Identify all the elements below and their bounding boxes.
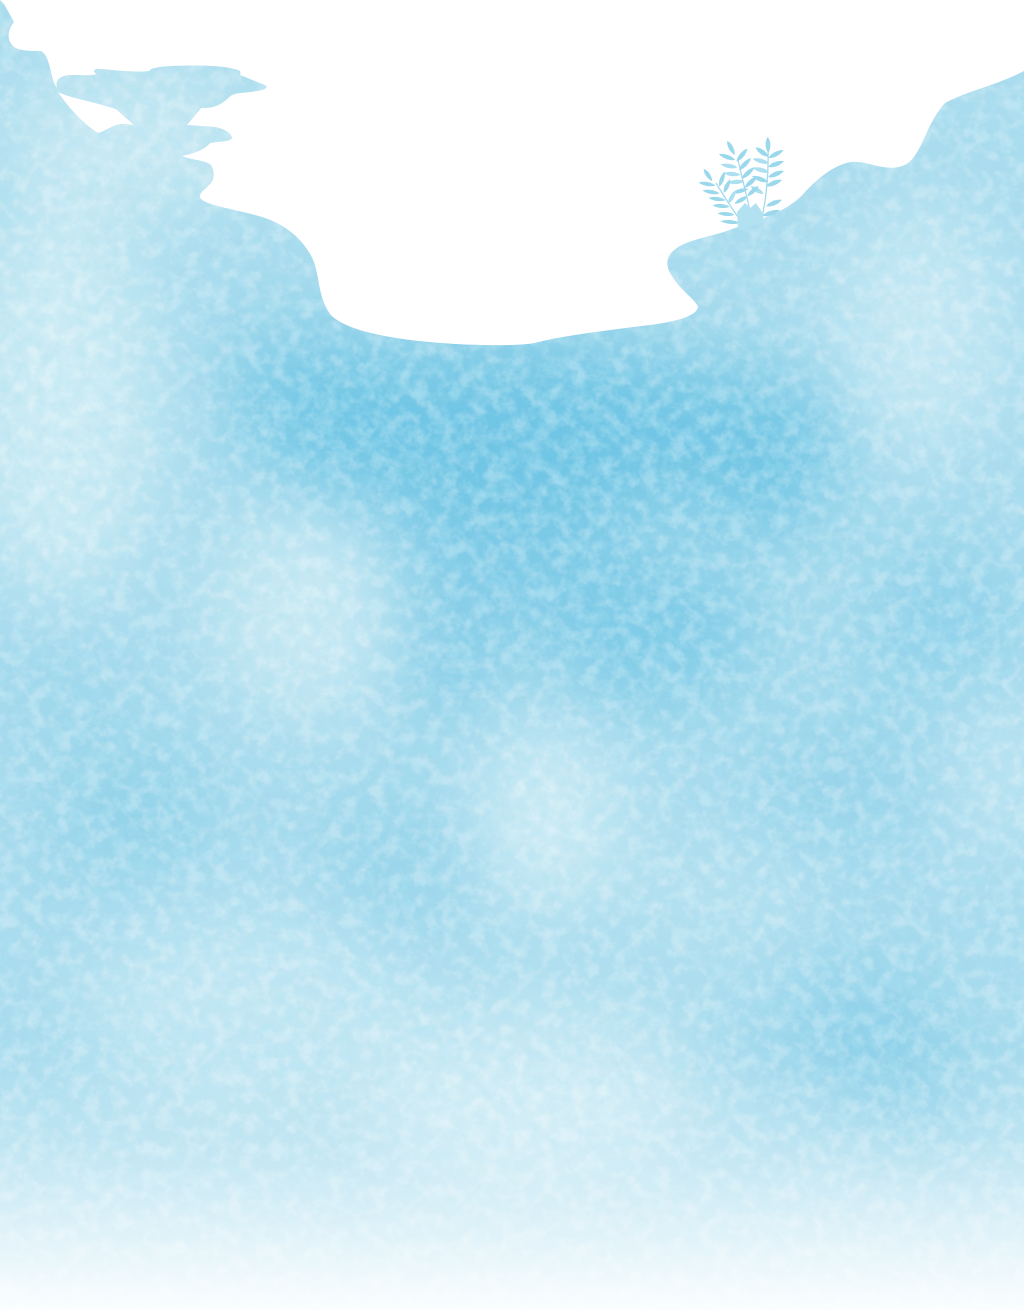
middle branch <box>718 140 760 215</box>
right branch <box>749 137 785 218</box>
deep washes <box>0 320 1020 1170</box>
plant base <box>737 203 764 230</box>
icon: fern plant <box>698 137 785 230</box>
left branch <box>698 168 740 225</box>
bottom fade <box>0 1050 1024 1310</box>
